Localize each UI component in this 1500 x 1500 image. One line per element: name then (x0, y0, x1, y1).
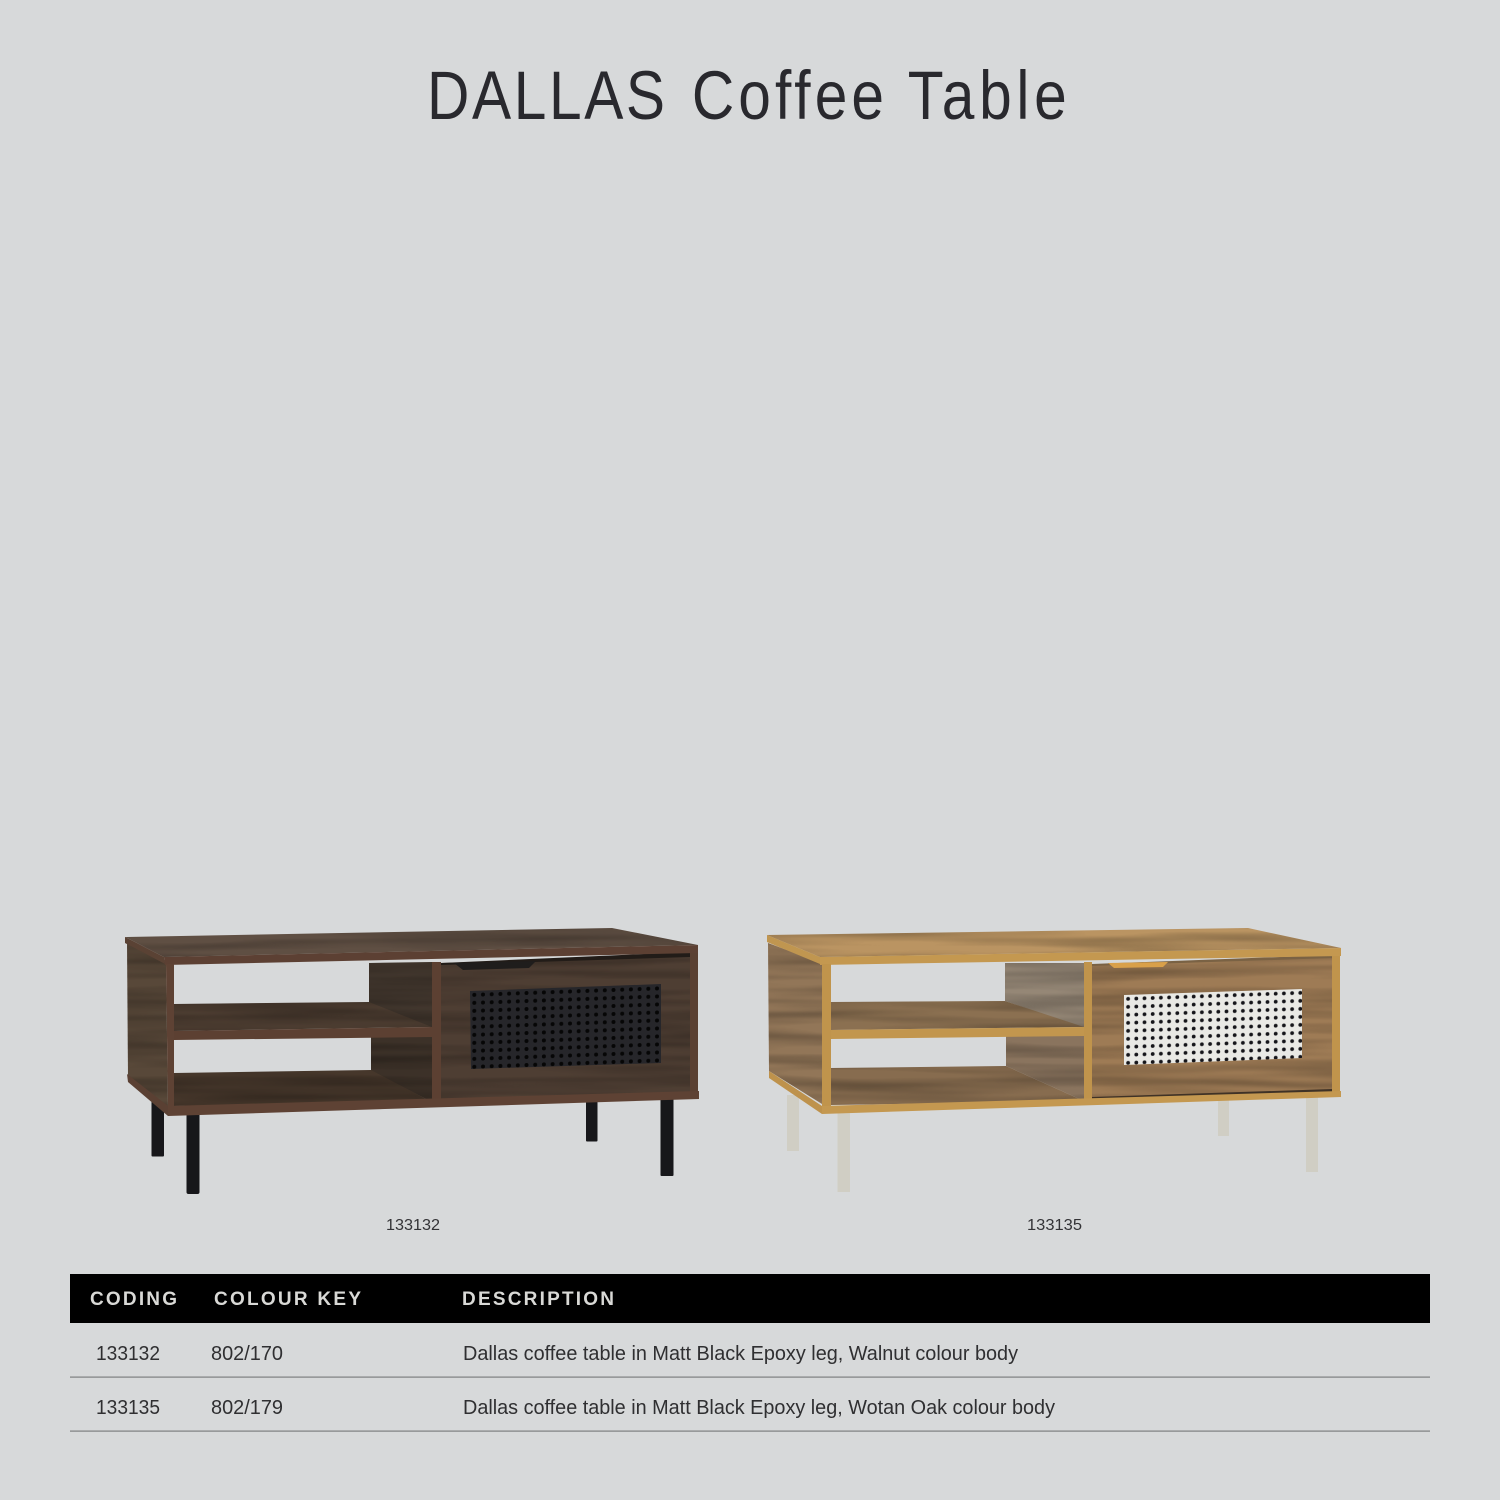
walnut table edges and frame (125, 937, 699, 1116)
table row: 133135 (70, 1397, 1430, 1432)
oak drawer mesh panel (1124, 989, 1302, 1065)
table row: 133135: 133135 (96, 1397, 160, 1419)
walnut drawer mesh panel (470, 984, 661, 1069)
table row: 133135: 802/179 (211, 1397, 283, 1419)
table header: DESCRIPTION (462, 1289, 614, 1310)
oak table edges and frame (767, 935, 1341, 1114)
table row: 133135: Dallas coffee table in Matt Black Epoxy leg, Wotan Oak colour body (463, 1397, 1055, 1419)
table row: 133132 (70, 1343, 1430, 1378)
oak drawer handle (1108, 962, 1168, 968)
oak table body (767, 928, 1341, 1105)
table row: 133132: 133132 (96, 1343, 160, 1365)
title: Table (908, 57, 1067, 134)
table row: 133132: Dallas coffee table in Matt Black Epoxy leg, Walnut colour body (463, 1343, 1018, 1365)
table header: CODING (90, 1289, 177, 1310)
table header: COLOUR KEY (214, 1289, 361, 1310)
product: walnut coffee table (125, 928, 699, 1194)
walnut table legs (152, 1095, 674, 1194)
oak table legs (787, 1092, 1318, 1192)
table row: 133132: 802/170 (211, 1343, 283, 1365)
title: Coffee (692, 57, 884, 134)
product: oak coffee table (767, 928, 1341, 1192)
walnut drawer handle (454, 961, 536, 970)
caption: 133132: 133132 (386, 1217, 440, 1234)
caption: 133135: 133135 (1027, 1217, 1082, 1234)
title (427, 57, 1067, 134)
table header (70, 1274, 1430, 1323)
title: DALLAS (427, 57, 665, 134)
walnut table body (125, 928, 698, 1107)
product table (70, 1274, 1430, 1432)
